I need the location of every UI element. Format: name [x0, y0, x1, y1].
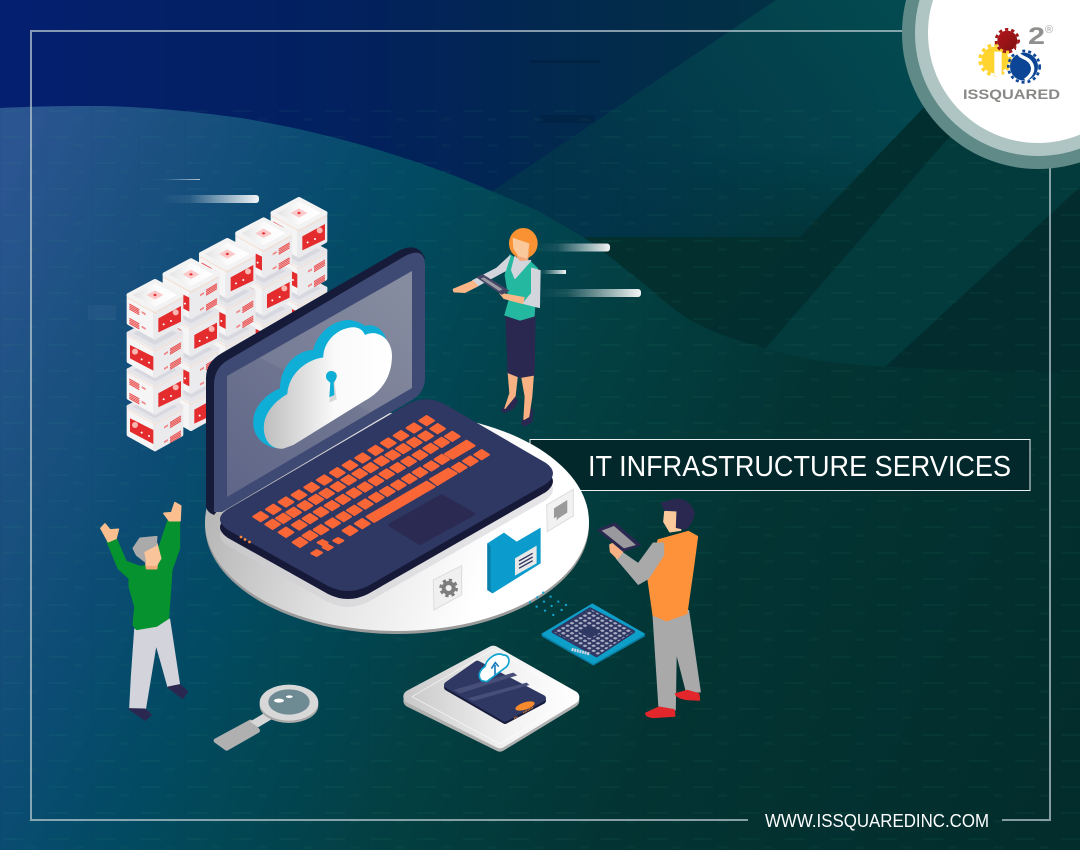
cloud with keyhole [253, 320, 392, 449]
indicator lights [240, 536, 251, 543]
phone on tile [410, 649, 576, 745]
laptop [206, 247, 553, 599]
logo mark text: 2 [1028, 23, 1045, 50]
logo mark text: ® [1045, 24, 1053, 36]
icon: upload cloud [479, 654, 509, 682]
server stacks [127, 199, 327, 449]
woman presenter [453, 228, 540, 426]
icon: document card [547, 489, 573, 532]
magnifying glass [216, 685, 318, 748]
logo mark text [963, 23, 1060, 102]
logo gears [980, 29, 1040, 82]
speed lines [150, 179, 641, 297]
trackpad [390, 496, 473, 543]
laptop base [220, 399, 553, 599]
title box [530, 440, 1030, 490]
keyboard [253, 416, 489, 556]
logo badge [902, 0, 1080, 169]
white disc platform [205, 413, 589, 634]
man celebrating [101, 503, 187, 720]
title box: IT INFRASTRUCTURE SERVICES [588, 451, 1011, 483]
laptop lid [206, 247, 425, 515]
data dots [529, 591, 567, 616]
logo mark text: ISSQUARED [963, 87, 1060, 102]
icon: gear card [433, 566, 462, 610]
chip [541, 603, 646, 666]
man with tablet [598, 499, 700, 717]
disc icons [433, 489, 573, 616]
icon: folder [487, 528, 541, 593]
footer url: WWW.ISSQUAREDINC.COM [765, 811, 989, 831]
